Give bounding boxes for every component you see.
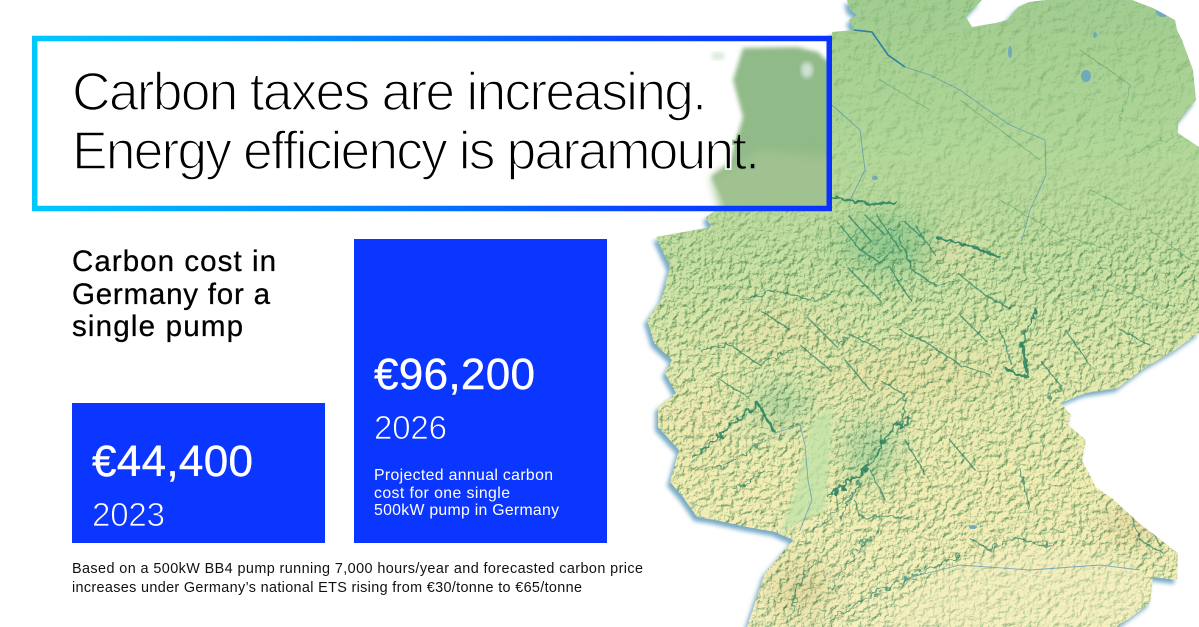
map of Germany: [642, 0, 1199, 627]
heading: carbon cost in Germany: Carbon cost in: [72, 245, 276, 278]
panel: 2026 cost: 2026: [374, 409, 447, 446]
panel: 2026 cost: cost for one single: [374, 485, 510, 502]
title frame gradient border: [35, 38, 829, 208]
title: Energy efficiency is paramount.: [72, 122, 760, 181]
heading: carbon cost in Germany: single pump: [72, 310, 243, 343]
panel: 2026 cost: 500kW pump in Germany: [374, 502, 559, 519]
footnote: Based on a 500kW BB4 pump running 7,000 hours/year and forecasted carbon price: [72, 561, 643, 577]
heading: carbon cost in Germany: [72, 245, 276, 343]
panel: 2023 cost: [72, 403, 325, 543]
title panel background with blurred map: [706, 42, 826, 206]
panel: 2023 cost: €44,400: [92, 437, 253, 486]
Rhine plain: [780, 407, 833, 533]
panel: 2026 cost: €96,200: [374, 350, 535, 399]
panel: 2026 cost: [354, 239, 607, 543]
panel: 2023 cost: 2023: [92, 496, 165, 533]
relief texture: [696, 0, 1199, 242]
heading: carbon cost in Germany: Germany for a: [72, 278, 271, 311]
rivers: [775, 30, 1140, 580]
panel: 2026 cost: Projected annual carbon: [374, 467, 553, 484]
title: [72, 63, 760, 181]
upland valleys: [693, 50, 1190, 620]
footnote: [72, 561, 643, 596]
footnote: increases under Germany’s national ETS rising from €30/tonne to €65/tonne: [72, 580, 582, 596]
title: Carbon taxes are increasing.: [72, 63, 707, 122]
lakes: [872, 7, 1170, 529]
